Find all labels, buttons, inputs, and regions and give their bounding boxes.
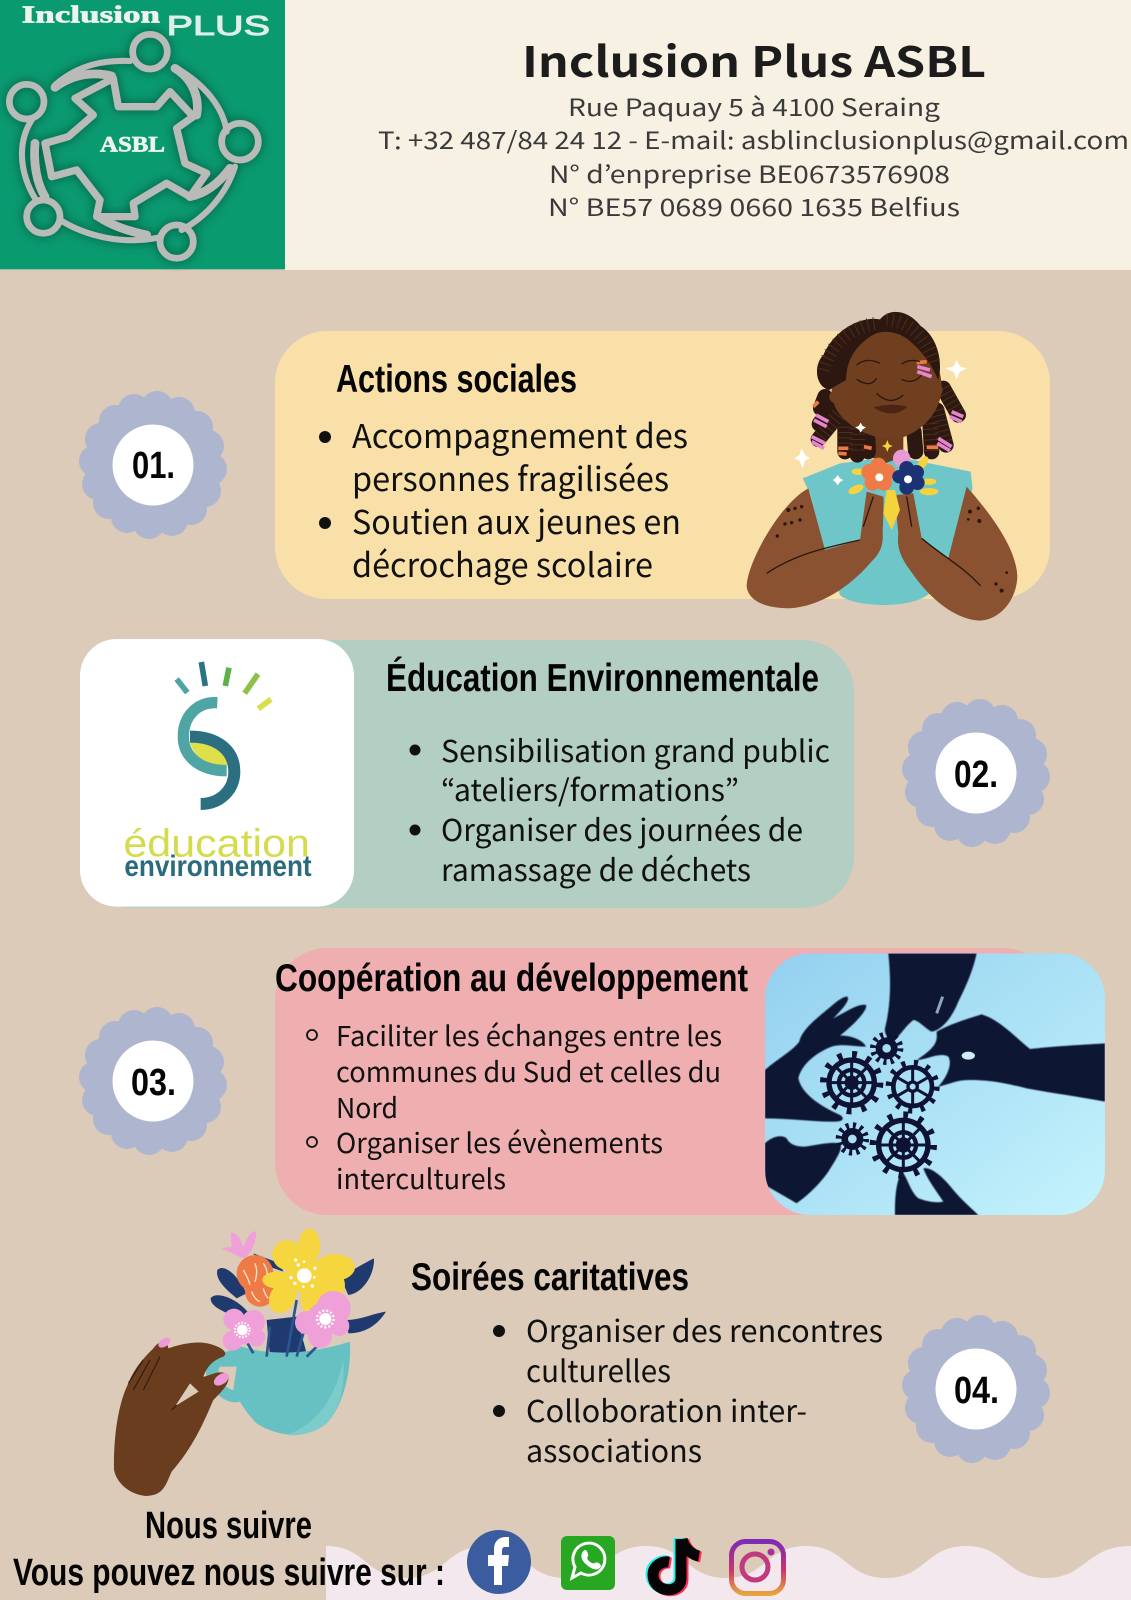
- bullet list: personnes fragilisées: [352, 453, 669, 501]
- bullet list: Sensibilisation grand public: [441, 727, 830, 771]
- heading: Soirées caritatives: [411, 1256, 689, 1299]
- photo: hands assembling gears: [765, 953, 1105, 1215]
- orange flower: [237, 1255, 275, 1307]
- bank number: N° BE57 0689 0660 1635 Belfius: [548, 188, 960, 223]
- heading: Coopération au développement: [275, 957, 748, 1000]
- yellow flower: [262, 1229, 355, 1318]
- badge 01: [79, 391, 227, 539]
- company number: N° d’enpreprise BE0673576908: [549, 155, 950, 190]
- header band: [285, 0, 1131, 270]
- bullet list: Organiser les évènements: [336, 1121, 663, 1161]
- gears: [824, 1035, 936, 1174]
- wordmark: éducation: [123, 822, 310, 866]
- badge 01: 01.: [132, 445, 175, 487]
- small person circles: [133, 34, 167, 69]
- bullet list: Colloboration inter-: [526, 1387, 807, 1431]
- heading: Éducation Environnementale: [386, 656, 819, 700]
- hair locks: [818, 388, 958, 455]
- illustration: hand holding cup of flowers: [114, 1229, 386, 1496]
- highlights: [962, 1052, 975, 1060]
- badge 03: 03.: [131, 1062, 176, 1104]
- stems: [247, 1300, 320, 1357]
- bullet list: “ateliers/formations”: [441, 766, 739, 810]
- bullet list: Accompagnement des: [352, 410, 688, 458]
- bullet list: Organiser des rencontres: [526, 1307, 883, 1351]
- badge 03: [79, 1007, 227, 1155]
- lock texture: [818, 388, 958, 455]
- cup: [206, 1342, 350, 1435]
- spiral: [183, 703, 227, 771]
- flowers: [847, 454, 938, 530]
- bullet list: [410, 727, 830, 890]
- pink bud: [222, 1231, 256, 1258]
- badge 04: [902, 1315, 1050, 1463]
- bullet list: [319, 410, 688, 587]
- address: Rue Paquay 5 à 4100 Seraing: [568, 88, 941, 123]
- heading: Actions sociales: [336, 358, 577, 401]
- logo: éducation environnement: [80, 639, 354, 907]
- footer text: Vous pouvez nous suivre sur :: [13, 1552, 445, 1594]
- icon: instagram: [732, 1542, 784, 1594]
- logo word: PLUS: PLUS: [167, 10, 270, 41]
- badge 02: [902, 699, 1050, 847]
- panel: Coopération au développement: [275, 948, 1055, 1215]
- neck: [863, 420, 903, 463]
- bullet list: décrochage scolaire: [352, 539, 653, 587]
- freckles: [776, 505, 1008, 593]
- leaves: [211, 1253, 386, 1357]
- icon: tiktok: [651, 1538, 701, 1591]
- arms: [747, 488, 884, 608]
- icon: whatsapp: [561, 1536, 615, 1590]
- bullet list: Faciliter les échanges entre les: [336, 1014, 722, 1054]
- bullet list: associations: [526, 1427, 702, 1471]
- organisation name: Inclusion Plus ASBL: [522, 29, 986, 90]
- logo: Inclusion Plus: [0, 0, 285, 269]
- bullet list: Organiser des journées de: [441, 806, 803, 850]
- panel: Éducation Environnementale: [80, 640, 854, 908]
- eyes, nose and mouth: [857, 360, 922, 400]
- badge 02: 02.: [954, 754, 998, 796]
- sparkles: [794, 360, 967, 485]
- shirt: [803, 459, 973, 605]
- pink flowers: [223, 1309, 265, 1351]
- panel: Soirées caritatives: [411, 1256, 883, 1471]
- rays: [177, 662, 271, 709]
- icon: facebook: [467, 1530, 531, 1594]
- illustration: woman holding flowers: [747, 312, 1017, 621]
- bullet list: [307, 1014, 722, 1197]
- nails: [157, 1336, 172, 1350]
- bullet list: [493, 1307, 883, 1471]
- bullet list: communes du Sud et celles du: [336, 1050, 721, 1090]
- footer heading: Nous suivre: [145, 1505, 312, 1547]
- logo: éducation environnement: environnement: [124, 850, 312, 883]
- beads: [812, 362, 963, 454]
- hair top: [817, 312, 940, 390]
- contact line: T: +32 487/84 24 12 - E-mail: asblinclusionplus@gmail.com: [378, 121, 1129, 156]
- panel: Actions sociales: [275, 331, 1050, 599]
- badge 04: 04.: [954, 1370, 999, 1412]
- hand: [114, 1342, 229, 1496]
- bullet list: culturelles: [526, 1347, 671, 1391]
- logo word: ASBL: ASBL: [100, 132, 165, 157]
- face: [832, 329, 942, 439]
- bullet list: interculturels: [336, 1157, 506, 1197]
- bullet list: Soutien aux jeunes en: [352, 496, 681, 544]
- hands: [885, 953, 977, 1042]
- logo word: Inclusion: Inclusion: [22, 3, 160, 29]
- bullet list: Nord: [336, 1086, 398, 1126]
- leaf: [190, 742, 229, 765]
- bullet list: ramassage de déchets: [441, 846, 751, 890]
- decorative wave: [326, 1546, 1131, 1600]
